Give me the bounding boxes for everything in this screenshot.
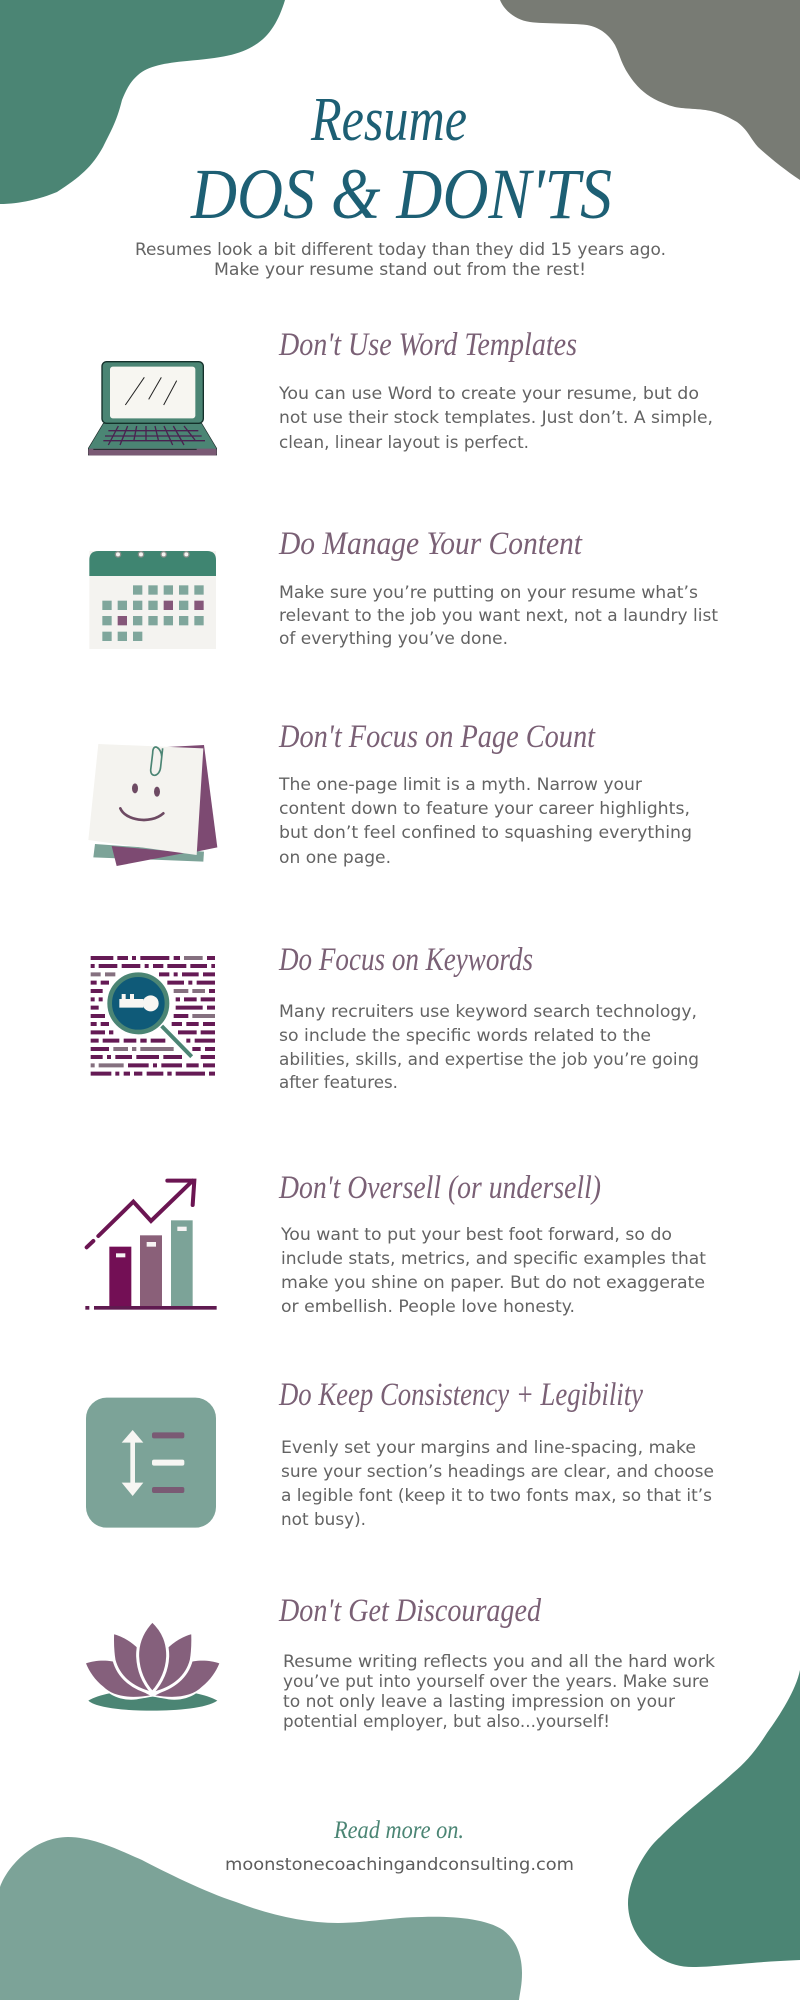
blob: bottom left bbox=[0, 1837, 522, 2000]
heading: Do Keep Consistency + Legibility bbox=[278, 1377, 643, 1413]
body text bbox=[281, 1438, 714, 1529]
panel: consistency and legibility bbox=[86, 1377, 714, 1529]
heading: Don't Use Word Templates bbox=[278, 327, 577, 363]
body text bbox=[278, 775, 692, 867]
body text: or embellish. People love honesty. bbox=[281, 1297, 575, 1316]
body text bbox=[283, 1652, 715, 1731]
body text: of everything you’ve done. bbox=[279, 629, 508, 648]
body text: but don’t feel confined to squashing everything bbox=[279, 823, 692, 842]
blob: top right bbox=[500, 0, 800, 180]
body text: not busy). bbox=[281, 1510, 366, 1529]
footer label: Read more on. bbox=[333, 1817, 464, 1844]
body text bbox=[279, 583, 719, 648]
body text: on one page. bbox=[279, 848, 391, 867]
footer url: moonstonecoachingandconsulting.com bbox=[225, 1855, 574, 1875]
panel: don't get discouraged bbox=[86, 1593, 715, 1731]
body text: potential employer, but also...yourself! bbox=[283, 1712, 610, 1731]
heading: Don't Focus on Page Count bbox=[278, 719, 596, 755]
body text: Resume writing reflects you and all the hard work bbox=[283, 1652, 715, 1671]
body text: not use their stock templates. Just don’t. A simple, bbox=[279, 408, 713, 427]
icon: growth chart bbox=[85, 1181, 217, 1310]
panel: oversell bbox=[85, 1170, 707, 1316]
title: DOS & DON'TS bbox=[190, 154, 612, 234]
body text: to not only leave a lasting impression on your bbox=[283, 1692, 675, 1711]
body text: make you shine on paper. But do not exaggerate bbox=[281, 1273, 705, 1292]
panel: manage your content bbox=[89, 526, 719, 649]
body text: The one-page limit is a myth. Narrow your bbox=[278, 775, 642, 794]
body text: Make sure you’re putting on your resume what’s bbox=[279, 583, 698, 602]
icon: calendar bbox=[89, 551, 216, 649]
body text: content down to feature your career highlights, bbox=[279, 799, 690, 818]
icon: line spacing bbox=[86, 1398, 216, 1528]
body text: so include the specific words related to the bbox=[279, 1026, 651, 1045]
icon: laptop bbox=[88, 362, 217, 455]
intro text: Resumes look a bit different today than they did 15 years ago. bbox=[135, 240, 666, 260]
heading: Don't Get Discouraged bbox=[278, 1593, 541, 1629]
heading: Do Manage Your Content bbox=[278, 526, 583, 562]
body text: Evenly set your margins and line-spacing, make bbox=[281, 1438, 696, 1457]
title bbox=[190, 86, 612, 234]
body text: You can use Word to create your resume, but do bbox=[278, 384, 699, 403]
body text: clean, linear layout is perfect. bbox=[279, 433, 529, 452]
body text: Many recruiters use keyword search technology, bbox=[279, 1002, 697, 1021]
body text: relevant to the job you want next, not a laundry list bbox=[279, 606, 719, 625]
body text: abilities, skills, and expertise the job you’re going bbox=[279, 1050, 699, 1069]
body text bbox=[278, 384, 713, 452]
body text bbox=[280, 1225, 707, 1316]
intro text bbox=[135, 240, 666, 280]
blob: top left bbox=[0, 0, 285, 204]
icon: lotus bbox=[86, 1621, 219, 1711]
heading: Don't Oversell (or undersell) bbox=[278, 1170, 601, 1206]
body text: include stats, metrics, and specific examples that bbox=[281, 1249, 707, 1268]
icon: keyword search bbox=[91, 958, 215, 1074]
body text: after features. bbox=[279, 1073, 398, 1092]
intro text: Make your resume stand out from the rest! bbox=[214, 260, 586, 280]
panel: keywords bbox=[91, 942, 699, 1092]
body text: you’ve put into yourself over the years. Make sure bbox=[283, 1672, 709, 1691]
panel: don't use word templates bbox=[88, 327, 713, 455]
body text: sure your section’s headings are clear, and choose bbox=[281, 1462, 714, 1481]
body text: a legible font (keep it to two fonts max, so that it’s bbox=[281, 1486, 712, 1505]
icon: sticky notes bbox=[88, 744, 217, 866]
blob: bottom right bbox=[628, 1670, 800, 1967]
title: Resume bbox=[310, 86, 467, 154]
panel: page count bbox=[88, 719, 692, 867]
body text bbox=[279, 1002, 699, 1092]
heading: Do Focus on Keywords bbox=[278, 942, 533, 978]
body text: You want to put your best foot forward, so do bbox=[280, 1225, 672, 1244]
